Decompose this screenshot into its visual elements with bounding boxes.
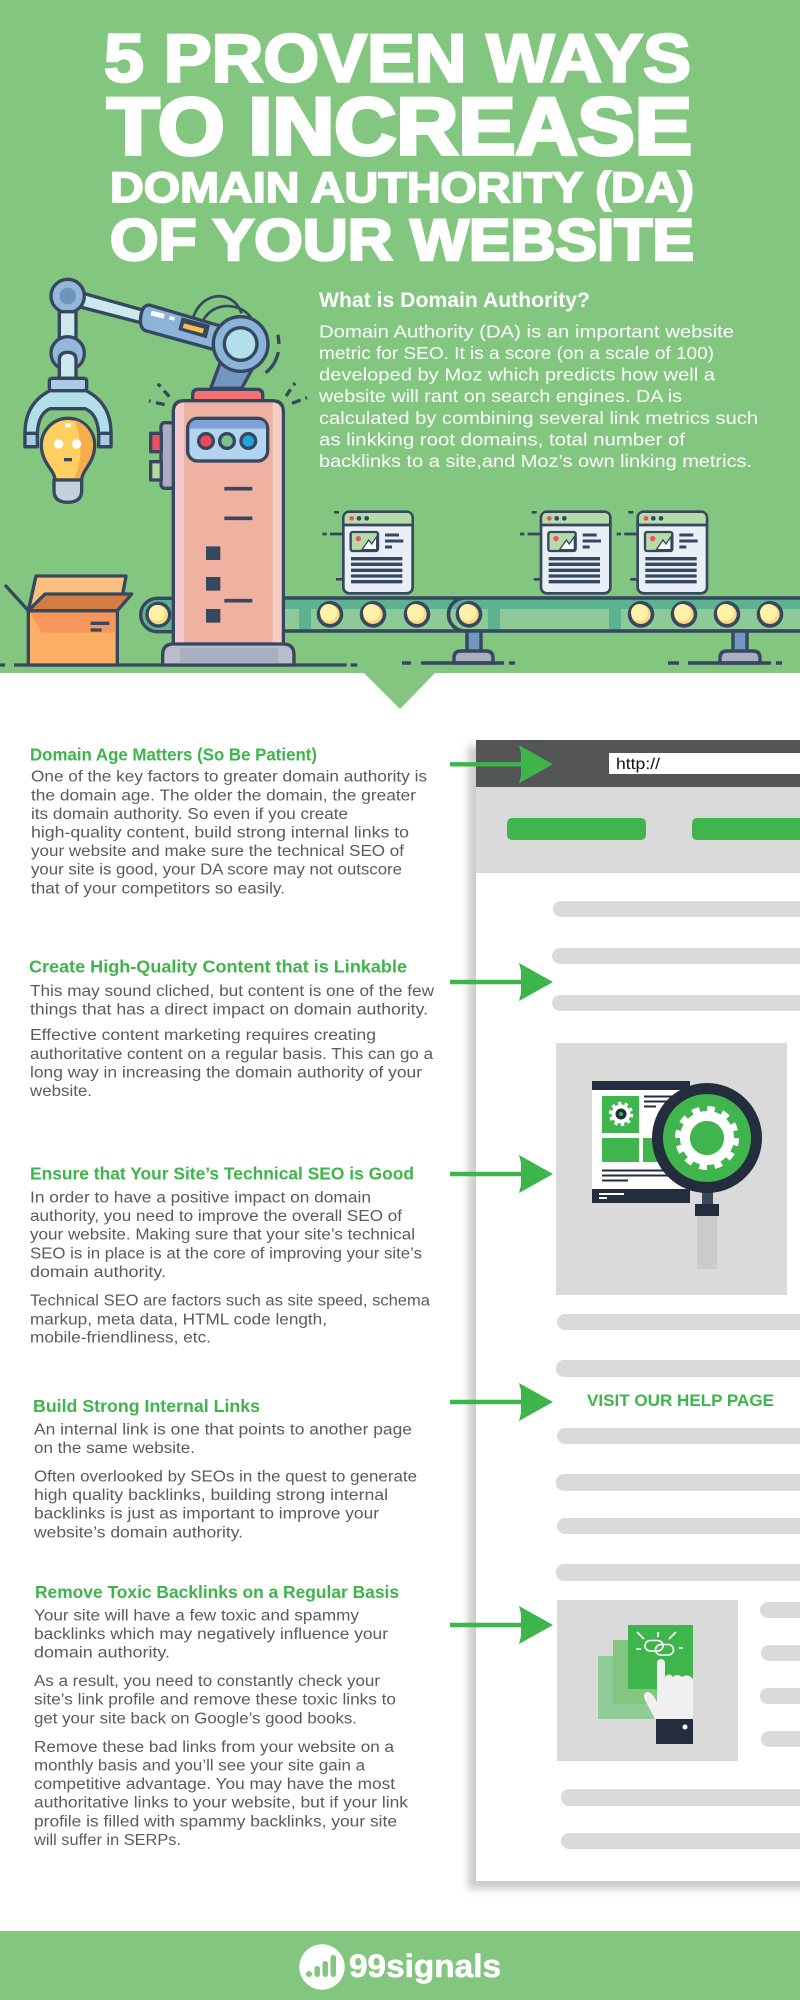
placeholder text lines — [552, 901, 800, 1849]
text: domain age: the domain age. The older the domain, the greater — [31, 787, 416, 804]
body marks — [224, 489, 252, 601]
text: technical seo: SEO is in place is at the core of improving your site’s — [30, 1245, 422, 1262]
upper arm — [82, 293, 145, 323]
heading: high-quality content: Create High-Quality Content that is Linkable — [29, 956, 407, 976]
text: toxic backlinks — [33, 1607, 408, 1849]
intro paragraph: Domain Authority (DA) is an important website — [319, 321, 734, 341]
text: high-quality content: long way in increasing the domain authority of your — [30, 1064, 422, 1081]
heading: toxic backlinks: Remove Toxic Backlinks on a Regular Basis — [35, 1582, 399, 1602]
heading: technical seo: Ensure that Your Site’s Technical SEO is Good — [30, 1163, 414, 1183]
arrow 5 — [450, 1606, 553, 1644]
text: high-quality content — [29, 983, 435, 1100]
logo icon — [299, 1944, 345, 1990]
icon: open box — [5, 576, 132, 665]
browser page — [476, 740, 800, 1881]
heading: domain age: Domain Age Matters (So Be Patient) — [30, 745, 317, 765]
pointer triangle under header — [363, 672, 436, 709]
footer band — [0, 1931, 800, 2000]
text: internal links — [33, 1421, 417, 1541]
text: technical seo: authority, you need to improve the overall SEO of — [30, 1208, 403, 1225]
arrow 1 — [450, 745, 553, 783]
section: internal links — [33, 1396, 417, 1541]
text: toxic backlinks: Remove these bad links from your website on a — [34, 1739, 395, 1756]
text: toxic backlinks: As a result, you need to constantly check your — [34, 1673, 380, 1690]
cables — [193, 296, 252, 320]
conveyor legs — [402, 631, 782, 663]
text: domain age: One of the key factors to greater domain authority is — [31, 769, 427, 786]
text: internal links: high quality backlinks, building strong internal — [34, 1487, 388, 1504]
text: toxic backlinks: will suffer in SERPs. — [33, 1832, 181, 1849]
text: technical seo: In order to have a positive impact on domain — [30, 1190, 371, 1207]
text: high-quality content: authoritative content on a regular basis. This can go a — [30, 1046, 434, 1063]
text: domain age: high-quality content, build strong internal links to — [31, 824, 409, 841]
text: internal links: on the same website. — [34, 1440, 195, 1457]
motion dashes — [149, 335, 307, 405]
text: toxic backlinks: competitive advantage. You may have the most — [34, 1776, 396, 1793]
heading: internal links: Build Strong Internal Links — [33, 1396, 260, 1416]
text: domain age — [31, 769, 427, 897]
logo wordmark: 99signals — [349, 1948, 501, 1984]
intro paragraph: metric for SEO. It is a score (on a scale of 100) — [319, 343, 714, 363]
text: toxic backlinks: site’s link profile and remove these toxic links to — [34, 1692, 396, 1709]
nav bar — [476, 787, 800, 873]
section: domain age — [30, 745, 427, 897]
title — [104, 20, 694, 273]
text: technical seo: your website. Making sure that your site’s technical — [30, 1227, 415, 1244]
section: toxic backlinks — [33, 1582, 408, 1849]
text: internal links: An internal link is one that points to another page — [34, 1421, 412, 1438]
text: toxic backlinks: authoritative links to your website, but if your link — [34, 1795, 408, 1812]
address field: http:// — [616, 756, 661, 773]
title: TO INCREASE — [107, 82, 692, 172]
ground line — [0, 660, 357, 670]
text: high-quality content: Effective content marketing requires creating — [30, 1027, 376, 1044]
arrow 3 — [450, 1155, 553, 1193]
link: visit our help page: VISIT OUR HELP PAGE — [587, 1391, 774, 1410]
arm stand — [211, 362, 252, 388]
control panel — [188, 418, 268, 461]
browser panel — [468, 740, 800, 1889]
browser top bar — [476, 740, 800, 787]
section: technical seo — [30, 1163, 431, 1347]
text: domain age: your website and make sure the technical SEO of — [31, 843, 405, 860]
wrist — [51, 279, 84, 313]
intro paragraph: as linkking root domains, total number of — [319, 430, 685, 450]
conveyor belt — [283, 598, 800, 631]
intro paragraph: developed by Moz which predicts how well a — [319, 364, 715, 384]
text: technical seo: markup, meta data, HTML code length, — [30, 1311, 327, 1328]
text: toxic backlinks: backlinks which may negatively influence your — [34, 1626, 388, 1643]
base — [163, 644, 294, 665]
intro paragraph: calculated by combining several link metrics such — [319, 408, 758, 428]
text: toxic backlinks: Your site will have a few toxic and spammy — [34, 1607, 359, 1624]
text: high-quality content: This may sound cliched, but content is one of the few — [30, 983, 435, 1000]
intro text: what is domain authority — [318, 288, 758, 471]
intro heading: What is Domain Authority? — [319, 288, 590, 312]
panel shadow — [468, 746, 800, 1889]
arrow 2 — [450, 963, 553, 1001]
panel: green header background — [0, 0, 800, 673]
image: page with magnifier and gear — [556, 1043, 787, 1295]
title: 5 PROVEN WAYS — [104, 20, 691, 96]
robot body — [151, 389, 283, 644]
title: OF YOUR WEBSITE — [110, 208, 694, 273]
conveyor left end — [141, 598, 175, 632]
text: internal links: website’s domain authority. — [33, 1524, 243, 1541]
icon: web page windows on conveyor — [322, 512, 707, 593]
claw — [25, 378, 111, 447]
text: toxic backlinks: monthly basis and you’ll see your site gain a — [34, 1757, 366, 1774]
text: high-quality content: things that has a direct impact on domain authority. — [30, 1002, 428, 1019]
intro paragraph: website will rant on search engines. DA is — [318, 386, 682, 406]
text: technical seo: domain authority. — [30, 1264, 166, 1281]
intro paragraph: backlinks to a site,and Moz’s own linking metrics. — [319, 451, 752, 471]
icon: light bulb — [41, 418, 95, 502]
address field — [609, 753, 800, 774]
text: toxic backlinks: profile is filled with spammy backlinks, your site — [34, 1813, 397, 1830]
text: technical seo: mobile-friendliness, etc. — [30, 1330, 211, 1347]
text: domain age: that of your competitors so easily. — [31, 880, 285, 897]
title: DOMAIN AUTHORITY (DA) — [110, 164, 694, 212]
text: domain age: its domain authority. So even if you create — [31, 806, 348, 823]
text: high-quality content: website. — [29, 1083, 92, 1100]
text: toxic backlinks: get your site back on Google’s good books. — [34, 1710, 357, 1727]
shoulder joint — [213, 317, 268, 371]
image: hand clicking link — [557, 1600, 738, 1761]
intro paragraph — [318, 321, 758, 471]
text: domain age: your site is good, your DA score may not outscore — [31, 862, 402, 879]
text: internal links: backlinks is just as important to improve your — [34, 1506, 379, 1523]
arrow 4 — [450, 1383, 553, 1421]
text: technical seo: Technical SEO are factors such as site speed, schema — [30, 1293, 431, 1310]
text: toxic backlinks: domain authority. — [34, 1644, 170, 1661]
text: technical seo — [30, 1190, 431, 1347]
text: internal links: Often overlooked by SEOs in the quest to generate — [34, 1468, 417, 1485]
section: high-quality content — [29, 956, 435, 1100]
illustration: robot arm with light bulb and box — [0, 279, 357, 665]
